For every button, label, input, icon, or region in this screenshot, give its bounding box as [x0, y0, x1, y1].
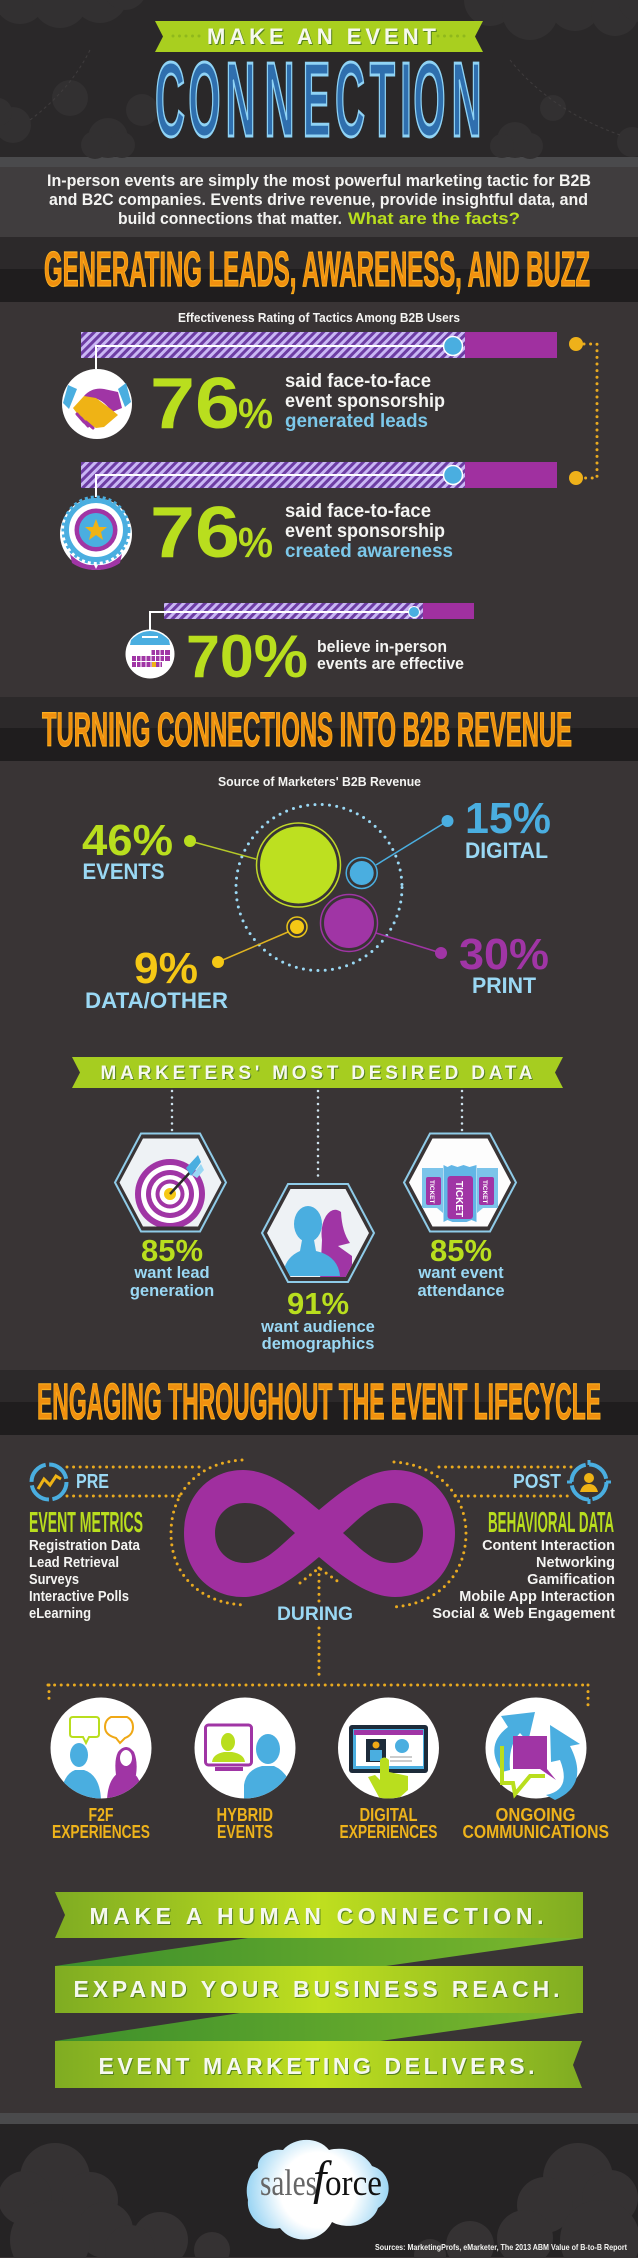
bar 2: 76% awareness [81, 462, 557, 497]
stat: 76% leads: % [238, 390, 273, 438]
intro text: and B2C companies. Events drive revenue, provide insightful data, and [49, 191, 588, 209]
label: hybrid events [216, 1805, 273, 1842]
connector: yellow dotted [569, 337, 597, 485]
subtitle: source of revenue: Source of Marketers' B2B Revenue [218, 775, 421, 789]
ribbon: expand your business reach: EXPAND YOUR BUSINESS REACH. [74, 1976, 560, 2002]
stat: 70%: 70% [186, 623, 308, 690]
text: generated leads [285, 371, 445, 432]
list: pre metrics: Interactive Polls [29, 1589, 129, 1605]
label: post: POST [513, 1471, 561, 1493]
icon: badge [60, 497, 132, 570]
stat: 76% awareness: % [238, 519, 273, 567]
text: EVENT METRICS [29, 1507, 143, 1539]
icon: calendar [126, 630, 174, 678]
label: ongoing communications: ONGOING [496, 1805, 576, 1825]
icon: tickets [404, 1134, 516, 1232]
text: created awareness: said face-to-face [285, 501, 431, 522]
text: generated leads: said face-to-face [285, 371, 431, 392]
clouds: footer [0, 2143, 638, 2258]
list: pre metrics: Lead Retrieval [29, 1555, 119, 1571]
intro text [47, 172, 591, 228]
dotted connectors [172, 1091, 462, 1182]
intro text: What are the facts? [348, 210, 520, 228]
text: 91% audience demographics: demographics [262, 1335, 374, 1353]
stat: 76% leads [150, 364, 273, 444]
icon: pre [32, 1464, 66, 1500]
text: believe in-person [317, 637, 464, 673]
label: 15% digital [465, 794, 551, 863]
label: 46% events: EVENTS [82, 859, 164, 884]
banner: most desired data [72, 1057, 563, 1088]
bar 3: 70% [150, 603, 474, 630]
infinity symbol [184, 1470, 455, 1597]
label: hybrid events: HYBRID [216, 1805, 273, 1825]
label: 30% print: PRINT [472, 973, 537, 998]
text: 91% audience demographics [260, 1286, 375, 1353]
text: created awareness: event sponsorship [285, 521, 445, 542]
bar 1: 76% leads [81, 332, 557, 369]
label: ongoing communications: COMMUNICATIONS [462, 1822, 609, 1842]
list: post data [432, 1538, 615, 1622]
list: pre metrics [29, 1538, 141, 1622]
text: 91% audience demographics: 91% [287, 1286, 349, 1321]
text: 85% lead generation: generation [130, 1282, 214, 1300]
intro text: In-person events are simply the most powerful marketing tactic for B2B [47, 172, 591, 190]
icon: post [567, 1460, 611, 1504]
ribbon folds [55, 1938, 583, 2041]
text: generated leads: generated leads [285, 411, 428, 432]
icon: hybrid [194, 1698, 296, 1800]
banner: make an event: MAKE AN EVENT [207, 24, 437, 49]
dotted connectors: lifecycle [48, 1460, 589, 1710]
list: post data: Networking [536, 1555, 615, 1571]
icon: audience [262, 1184, 374, 1282]
ribbon: event marketing delivers: EVENT MARKETING DELIVERS. [98, 2053, 534, 2079]
stat: 76% awareness [150, 493, 273, 573]
salesforce logo: orce [325, 2163, 382, 2204]
text: created awareness: created awareness [285, 541, 453, 562]
list: post data: Social & Web Engagement [432, 1606, 615, 1622]
label: 9% data/other [85, 944, 228, 1013]
icon: ongoing [486, 1698, 586, 1800]
label: ongoing communications [462, 1805, 609, 1842]
list: post data: Mobile App Interaction [459, 1589, 615, 1605]
text: generated leads: event sponsorship [285, 391, 445, 412]
text: believe in-person: events are effective [317, 654, 464, 673]
banner: most desired data: MARKETERS' MOST DESIRED DATA [100, 1063, 533, 1084]
label: digital experiences [340, 1805, 438, 1842]
text: believe in-person: believe in-person [317, 637, 447, 656]
icon: tickets: TICKET [481, 1180, 488, 1204]
ribbon: make a human connection: MAKE A HUMAN CONNECTION. [90, 1903, 544, 1929]
salesforce logo: sales [260, 2163, 317, 2204]
list: pre metrics: Surveys [29, 1572, 79, 1588]
icon: f2f [50, 1698, 152, 1800]
icon: tickets: TICKET [428, 1180, 435, 1204]
label: digital experiences: EXPERIENCES [340, 1822, 438, 1842]
icon: handshake [62, 369, 132, 439]
list: pre metrics: eLearning [29, 1606, 91, 1622]
label: 15% digital: DIGITAL [465, 838, 548, 863]
subtitle: effectiveness rating: Effectiveness Rating of Tactics Among B2B Users [178, 311, 460, 325]
footer background [0, 2113, 638, 2257]
list: post data: Gamification [527, 1572, 615, 1588]
intro text: build connections that matter. [118, 210, 342, 228]
label: f2f experiences: F2F [88, 1805, 114, 1825]
text: 85% event attendance [417, 1233, 505, 1300]
bubble chart [184, 804, 454, 970]
icon: tickets: TICKET [453, 1181, 464, 1217]
stat: 76% awareness: 76 [150, 493, 240, 573]
clouds: header [0, 0, 638, 159]
label: 9% data/other: 9% [134, 944, 198, 993]
label: f2f experiences [52, 1805, 150, 1842]
label: during: DURING [277, 1603, 353, 1625]
label: 30% print: 30% [459, 930, 549, 979]
ribbon: make a human connection [55, 1892, 583, 1938]
label: 9% data/other: DATA/OTHER [85, 988, 228, 1013]
ribbon: expand your business reach [55, 1966, 583, 2013]
list: post data: Content Interaction [482, 1538, 615, 1554]
title: connection: CONNECTION [155, 41, 481, 160]
text: 85% lead generation: 85% [141, 1233, 203, 1268]
stat: 76% leads: 76 [150, 364, 240, 444]
label: 15% digital: 15% [465, 794, 551, 843]
list: pre metrics: Registration Data [29, 1538, 141, 1554]
text: 85% event attendance: want event [417, 1264, 504, 1282]
label: 46% events: 46% [82, 816, 173, 865]
ribbon: event marketing delivers [55, 2041, 582, 2088]
text: 85% lead generation: want lead [133, 1264, 210, 1282]
icon: target [115, 1134, 226, 1232]
label: f2f experiences: EXPERIENCES [52, 1822, 150, 1842]
icon: digital [338, 1698, 439, 1799]
text: created awareness [285, 501, 453, 562]
label: 46% events [82, 816, 173, 884]
text: 85% event attendance: 85% [430, 1233, 492, 1268]
banner: make an event [155, 21, 483, 52]
text: 85% event attendance: attendance [417, 1282, 505, 1300]
text: 91% audience demographics: want audience [260, 1318, 375, 1336]
salesforce logo: f [313, 2152, 332, 2205]
text: 85% lead generation [130, 1233, 214, 1300]
label: digital experiences: DIGITAL [360, 1805, 418, 1825]
label: pre: PRE [76, 1471, 109, 1493]
label: hybrid events: EVENTS [217, 1822, 273, 1842]
salesforce logo [247, 2140, 389, 2239]
